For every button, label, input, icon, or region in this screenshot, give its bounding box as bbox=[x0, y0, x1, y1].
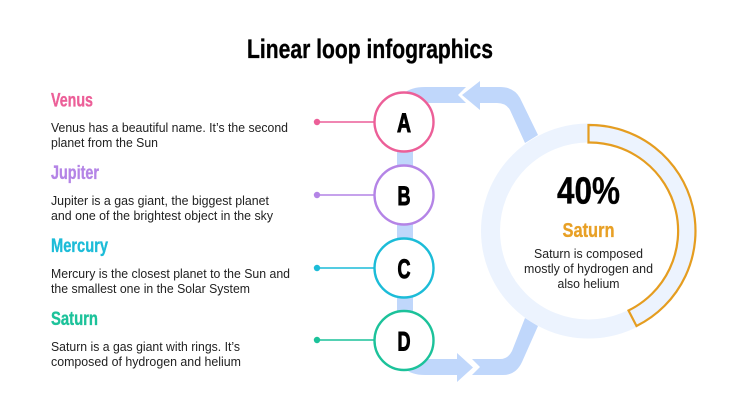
center value: 40%: 40% bbox=[557, 170, 620, 212]
center description: Saturn is composed bbox=[534, 247, 643, 261]
node C: C bbox=[398, 254, 410, 284]
text block: Saturn: composed of hydrogen and helium bbox=[51, 355, 241, 369]
ring track bbox=[490, 133, 686, 329]
connector: Saturn bbox=[314, 337, 375, 343]
arrow: left rail from D up to A bbox=[397, 87, 473, 382]
center description: also helium bbox=[558, 277, 620, 291]
connector: Jupiter bbox=[314, 192, 375, 198]
center description bbox=[524, 247, 653, 291]
text block: Saturn: Saturn bbox=[51, 309, 98, 330]
node A: A bbox=[397, 108, 411, 138]
text block: Venus: Venus bbox=[51, 90, 93, 112]
text block: Venus: Venus has a beautiful name. It’s the second bbox=[51, 121, 288, 135]
node D: D bbox=[398, 326, 410, 356]
text block: Jupiter bbox=[51, 163, 274, 223]
progress ring bbox=[490, 125, 695, 329]
connector: Mercury bbox=[314, 265, 375, 271]
ring 40% arc bbox=[588, 125, 695, 326]
center heading: Saturn: Saturn bbox=[562, 220, 614, 242]
node D bbox=[374, 311, 434, 370]
node B: B bbox=[398, 181, 410, 211]
text block: Venus: planet from the Sun bbox=[51, 136, 158, 150]
node B bbox=[374, 166, 434, 224]
text block: Mercury: Mercury bbox=[51, 236, 108, 257]
text block: Saturn bbox=[51, 309, 241, 369]
text block: Jupiter: Jupiter bbox=[51, 163, 99, 184]
text block: Mercury: the smallest one in the Solar System bbox=[51, 282, 250, 296]
text block: Mercury bbox=[51, 236, 290, 296]
arrow: return to A bbox=[462, 81, 538, 143]
loop arrows bbox=[397, 81, 538, 382]
text block: Jupiter: and one of the brightest object in the sky bbox=[51, 209, 274, 223]
text block: Jupiter: Jupiter is a gas giant, the biggest planet bbox=[51, 194, 270, 208]
text block: Venus bbox=[51, 90, 288, 150]
node A bbox=[374, 92, 434, 152]
connector: Venus bbox=[314, 119, 375, 125]
text block: Mercury: Mercury is the closest planet to the Sun and bbox=[51, 267, 290, 281]
text block: Saturn: Saturn is a gas giant with rings. It’s bbox=[51, 340, 240, 354]
node C bbox=[374, 238, 434, 298]
arrow: exit from D bbox=[472, 318, 538, 375]
center description: mostly of hydrogen and bbox=[524, 262, 653, 276]
title: Linear loop infographics bbox=[247, 34, 493, 64]
